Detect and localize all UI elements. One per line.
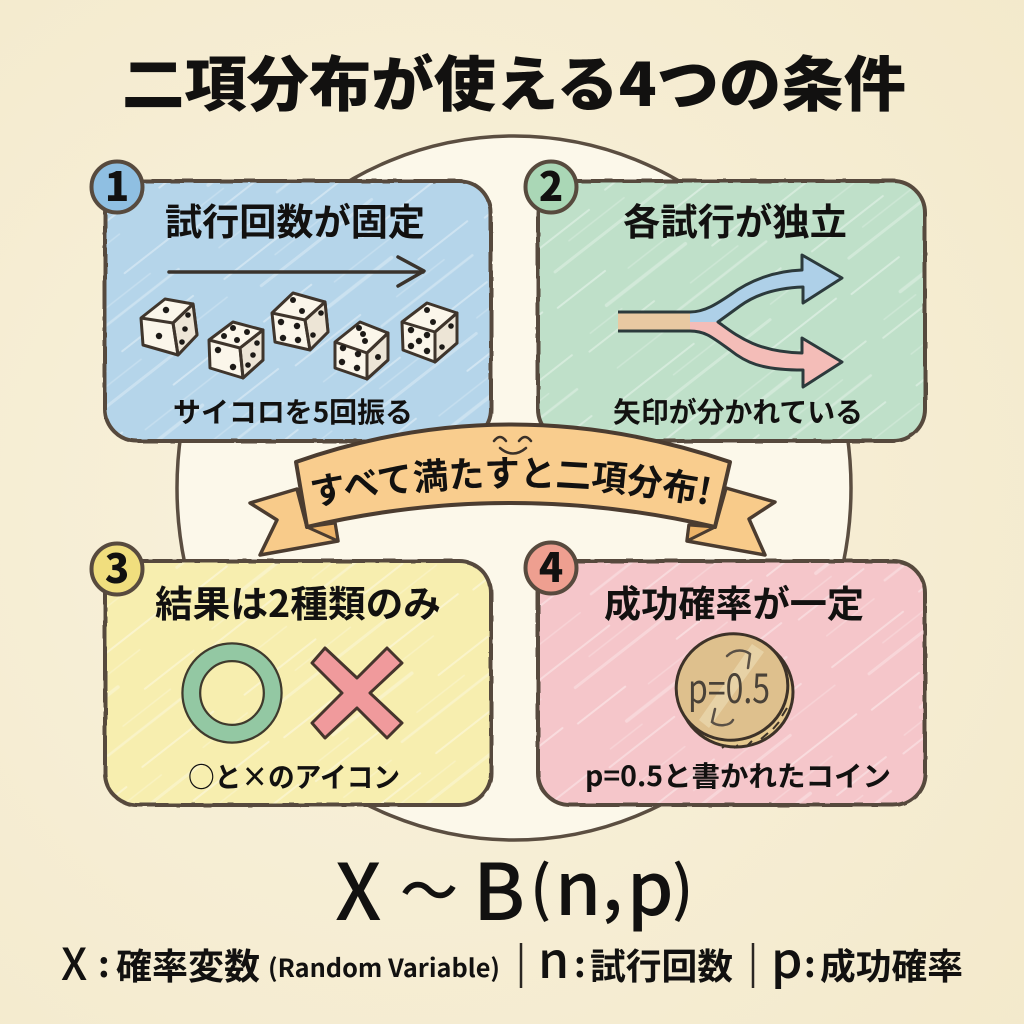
legend: X bbox=[61, 929, 500, 993]
banner left tail bbox=[250, 489, 338, 555]
divider bbox=[521, 943, 753, 988]
badge 1 bbox=[92, 155, 142, 213]
legend: X: : bbox=[98, 936, 110, 988]
coin label: p=0.5 bbox=[688, 657, 770, 715]
legend: p: p bbox=[771, 921, 802, 993]
panel 1: fixed number of trials bbox=[105, 181, 491, 441]
legend: X: X bbox=[61, 929, 87, 993]
formula: ( bbox=[530, 841, 551, 928]
legend: p: : bbox=[804, 936, 816, 988]
badge 2: 2 bbox=[539, 155, 563, 213]
heading 2: 各試行が独立 bbox=[623, 192, 847, 246]
banner bbox=[248, 422, 777, 557]
banner folds bbox=[307, 523, 715, 541]
badge 2 bbox=[526, 155, 576, 213]
formula: X bbox=[335, 831, 382, 943]
smile bbox=[494, 437, 531, 454]
icon: branching arrows bbox=[618, 255, 842, 387]
legend: p bbox=[771, 921, 963, 993]
arrow: trial sequence bbox=[169, 257, 424, 286]
formula: 〜 bbox=[400, 845, 458, 929]
panel 2: independent trials bbox=[538, 181, 925, 441]
formula: n bbox=[555, 830, 601, 937]
panel 4: constant success probability bbox=[538, 561, 925, 805]
icon: cross mark bbox=[312, 648, 402, 738]
legend: X: (Random Variable) bbox=[268, 949, 500, 985]
badge 3 bbox=[92, 537, 142, 595]
icon: circle mark bbox=[191, 652, 273, 734]
heading 4: 成功確率が一定 bbox=[604, 574, 864, 628]
caption 2: 矢印が分かれている bbox=[613, 391, 863, 431]
badge 4 bbox=[526, 536, 576, 594]
formula bbox=[335, 830, 693, 943]
icon: coin bbox=[664, 621, 800, 753]
banner text: すべて満たすと二項分布! bbox=[312, 457, 710, 506]
formula: ) bbox=[672, 841, 693, 928]
caption 1: サイコロを5回振る bbox=[173, 391, 413, 431]
title: 二項分布が使える4つの条件 bbox=[122, 37, 906, 124]
legend: X: 確率変数 bbox=[116, 938, 260, 990]
formula: p bbox=[627, 830, 674, 937]
badge 1: 1 bbox=[105, 155, 129, 213]
legend bbox=[61, 921, 963, 993]
panel 3: two outcomes bbox=[105, 561, 491, 805]
heading 1: 試行回数が固定 bbox=[165, 192, 425, 246]
badge 3: 3 bbox=[105, 537, 129, 595]
banner right tail bbox=[687, 488, 775, 555]
legend: n: : bbox=[574, 936, 586, 988]
legend: n: n bbox=[538, 921, 569, 993]
icon: five dice bbox=[141, 293, 457, 379]
background circle bbox=[177, 136, 851, 840]
heading 3: 結果は2種類のみ bbox=[155, 574, 441, 628]
caption 4: p=0.5と書かれたコイン bbox=[585, 755, 891, 795]
legend: p: 成功確率 bbox=[820, 938, 963, 990]
banner body bbox=[296, 424, 730, 527]
badge 4: 4 bbox=[539, 536, 563, 594]
formula: B bbox=[473, 831, 525, 943]
ring fill bbox=[191, 652, 273, 734]
formula: , bbox=[602, 830, 623, 931]
legend: n: 試行回数 bbox=[590, 938, 733, 990]
legend: n bbox=[538, 921, 733, 993]
caption 3: ○と×のアイコン bbox=[188, 756, 400, 796]
